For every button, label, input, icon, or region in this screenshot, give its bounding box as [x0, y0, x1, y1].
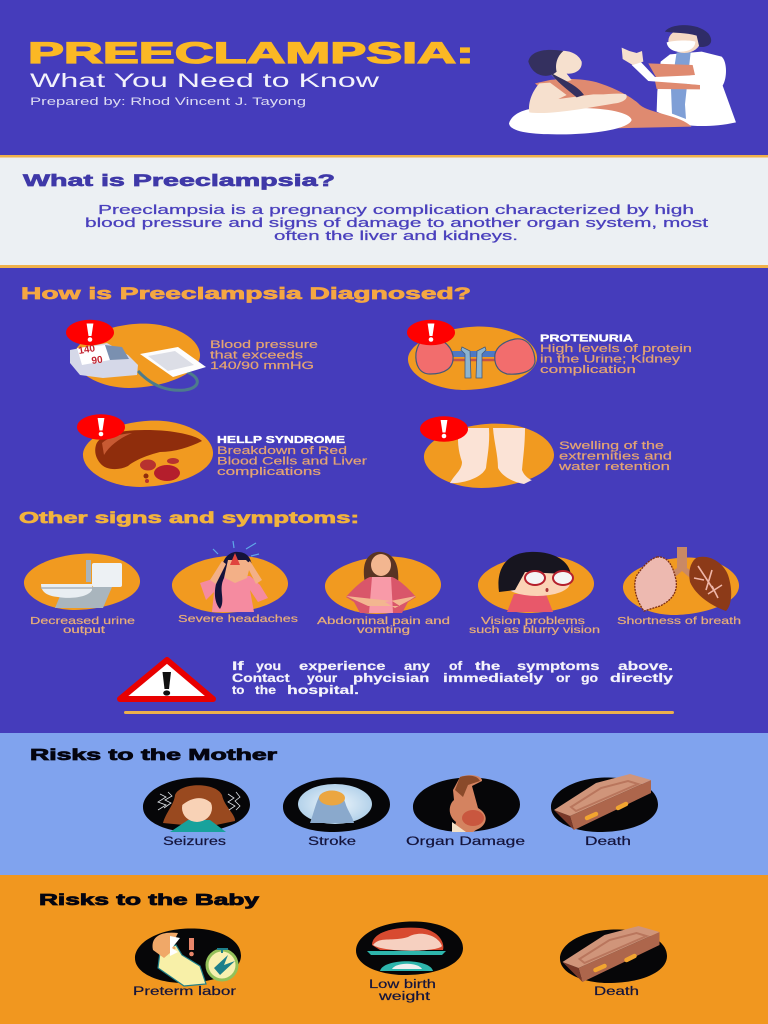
risk: low birth weight — [356, 921, 463, 1003]
description — [217, 445, 367, 478]
definition paragraph: often the liver and kidneys. — [274, 228, 518, 243]
label — [369, 979, 436, 1003]
symptom: vision problems — [469, 552, 600, 636]
band: what is preeclampsia — [0, 155, 768, 268]
warning text: your — [307, 673, 341, 685]
orange blob — [408, 327, 537, 390]
icon: pregnant woman and stopwatch — [153, 933, 237, 986]
icon: baby on scale — [367, 928, 446, 971]
warning text: phycisian — [353, 673, 434, 685]
bottom accent line — [0, 265, 768, 268]
warning text: symptoms — [517, 661, 604, 673]
risk: preterm labor — [133, 928, 241, 998]
label: Shortness of breath — [617, 615, 741, 627]
panel background — [0, 875, 768, 1024]
clipboard — [648, 63, 700, 89]
icon: liver and blood cells — [95, 430, 202, 483]
description: Blood pressure — [210, 339, 318, 351]
icon: child with dizzy glasses — [498, 552, 573, 612]
warning text: Contact — [232, 673, 294, 685]
warning text: or — [556, 673, 574, 685]
warning text: If — [232, 661, 249, 673]
subtitle: What You Need to Know — [30, 71, 379, 92]
description: that exceeds — [210, 350, 304, 362]
black blob — [143, 777, 250, 832]
symptom: abdominal pain — [317, 552, 450, 636]
icon: blood pressure monitor: 90 — [91, 354, 104, 367]
warning text: to — [232, 685, 248, 697]
label: Stroke — [308, 836, 356, 848]
icon: coffin — [562, 926, 660, 982]
label: Abdominal pain and — [317, 615, 450, 627]
orange blob — [172, 556, 288, 613]
warning text: immediately — [443, 673, 548, 685]
doctor hair — [665, 25, 711, 47]
risk: death — [551, 774, 658, 848]
warning text: the — [475, 661, 505, 673]
header background — [0, 0, 768, 155]
warning text: hospital. — [287, 685, 359, 697]
risk: stroke — [283, 777, 390, 848]
black blob — [551, 777, 658, 832]
label: Preterm labor — [133, 986, 236, 998]
item: blood pressure — [66, 320, 318, 390]
icon: head with glowing brain — [298, 784, 372, 824]
callout: warning — [120, 660, 674, 699]
illustration: pregnant woman and doctor — [509, 25, 736, 134]
label: Decreased urine — [30, 615, 135, 627]
label — [469, 615, 600, 636]
dress — [535, 79, 692, 128]
orange blob — [325, 557, 441, 614]
definition paragraph: blood pressure and signs of damage to another organ system, most — [85, 215, 709, 230]
doctor hand — [622, 48, 643, 65]
label — [30, 615, 135, 636]
alert badge — [420, 416, 468, 442]
icon: blood pressure monitor: 140 — [78, 343, 96, 357]
heading: Risks to the Baby — [39, 892, 259, 909]
pillow — [509, 107, 632, 134]
title: HELLP SYNDROME — [217, 434, 345, 446]
orange blob — [83, 421, 213, 487]
alert badge — [66, 320, 114, 345]
definition paragraph: Preeclampsia is a pregnancy complication characterized by high — [98, 202, 694, 217]
icon: woman with tremor — [158, 785, 240, 832]
black blob — [356, 921, 463, 975]
title: PROTENURIA — [540, 332, 634, 344]
author credit: Prepared by: Rhod Vincent J. Tayong — [30, 96, 306, 108]
description: complication — [540, 364, 636, 376]
label: Organ Damage — [406, 836, 525, 848]
symptom: shortness of breath — [617, 547, 741, 627]
panel: risks to the mother — [0, 733, 768, 875]
description: extremities and — [559, 450, 672, 462]
warning text: you — [256, 661, 285, 673]
icon: kidneys — [416, 337, 535, 378]
label: Severe headaches — [178, 613, 298, 625]
warning text: directly — [610, 673, 674, 685]
label: output — [63, 624, 105, 636]
warning text: any — [404, 661, 434, 673]
black blob — [283, 777, 390, 832]
doctor mask — [667, 40, 695, 52]
label: vomting — [357, 624, 410, 636]
item: proteinuria — [407, 320, 692, 390]
label: Vision problems — [481, 615, 585, 627]
warning text: the — [255, 685, 280, 697]
icon: lungs — [635, 547, 731, 611]
orange blob — [74, 324, 200, 388]
orange blob — [424, 424, 554, 488]
black blob — [560, 929, 667, 983]
panel background — [0, 733, 768, 875]
icon: woman with headache — [200, 541, 268, 612]
icon: warning triangle — [120, 660, 213, 699]
description — [540, 343, 692, 376]
risk: organ damage — [406, 775, 525, 848]
doctor scrubs — [671, 52, 691, 119]
heading: how diagnosed: How is Preeclampsia Diagnosed? — [21, 284, 471, 303]
warning text: experience — [299, 661, 390, 673]
description: in the Urine; Kidney — [540, 354, 681, 366]
warning text: above. — [618, 661, 673, 673]
orange blob — [478, 556, 594, 613]
description: Swelling of the — [559, 440, 664, 452]
warning text: of — [449, 661, 466, 673]
alert badge — [77, 414, 125, 440]
label: Seizures — [163, 836, 226, 848]
description: Breakdown of Red — [217, 445, 347, 457]
label — [317, 615, 450, 636]
orange blob — [623, 558, 739, 615]
top accent line — [0, 155, 768, 158]
title: PREECLAMPSIA: — [28, 37, 474, 70]
description — [557, 440, 672, 473]
woman arm — [529, 83, 627, 113]
label: weight — [377, 991, 431, 1003]
description: water retention — [557, 461, 670, 473]
definition paragraph — [85, 202, 709, 243]
icon: swollen legs — [450, 428, 532, 484]
woman head — [552, 51, 582, 83]
item: swelling — [420, 416, 672, 488]
description: complications — [217, 466, 322, 478]
description: 140/90 mmHG — [210, 360, 314, 372]
description — [210, 339, 318, 372]
icon: blood pressure monitor — [70, 343, 206, 390]
doctor head — [668, 29, 700, 53]
black blob — [135, 928, 241, 983]
symptom: severe headaches — [172, 541, 298, 625]
heading: Risks to the Mother — [30, 747, 277, 764]
panel: risks to the baby — [0, 875, 768, 1024]
item: hellp syndrome — [77, 414, 367, 487]
orange blob — [24, 554, 140, 610]
warning text — [232, 661, 674, 697]
label: Death — [594, 986, 639, 998]
doctor coat — [657, 52, 736, 126]
heading: other signs: Other signs and symptoms: — [19, 510, 359, 527]
description: High levels of protein — [540, 343, 692, 355]
risk: death — [560, 926, 667, 998]
icon: pregnant body anatomy — [450, 775, 486, 832]
panel background — [0, 158, 768, 265]
icon: coffin — [554, 774, 651, 830]
risk: seizures — [143, 777, 250, 848]
alert badge — [407, 320, 455, 345]
warning text: go — [581, 673, 602, 685]
heading: What is Preeclampsia? — [23, 171, 335, 190]
woman hair — [528, 50, 563, 76]
black blob — [413, 777, 520, 832]
label: Low birth — [369, 979, 436, 991]
doctor arm — [632, 60, 703, 85]
icon: woman holding abdomen — [346, 552, 416, 613]
icon: toilet — [41, 560, 122, 608]
label: such as blurry vision — [469, 624, 600, 636]
symptom: decreased urine — [24, 554, 140, 636]
description: Blood Cells and Liver — [217, 456, 367, 468]
label: Death — [585, 836, 631, 848]
